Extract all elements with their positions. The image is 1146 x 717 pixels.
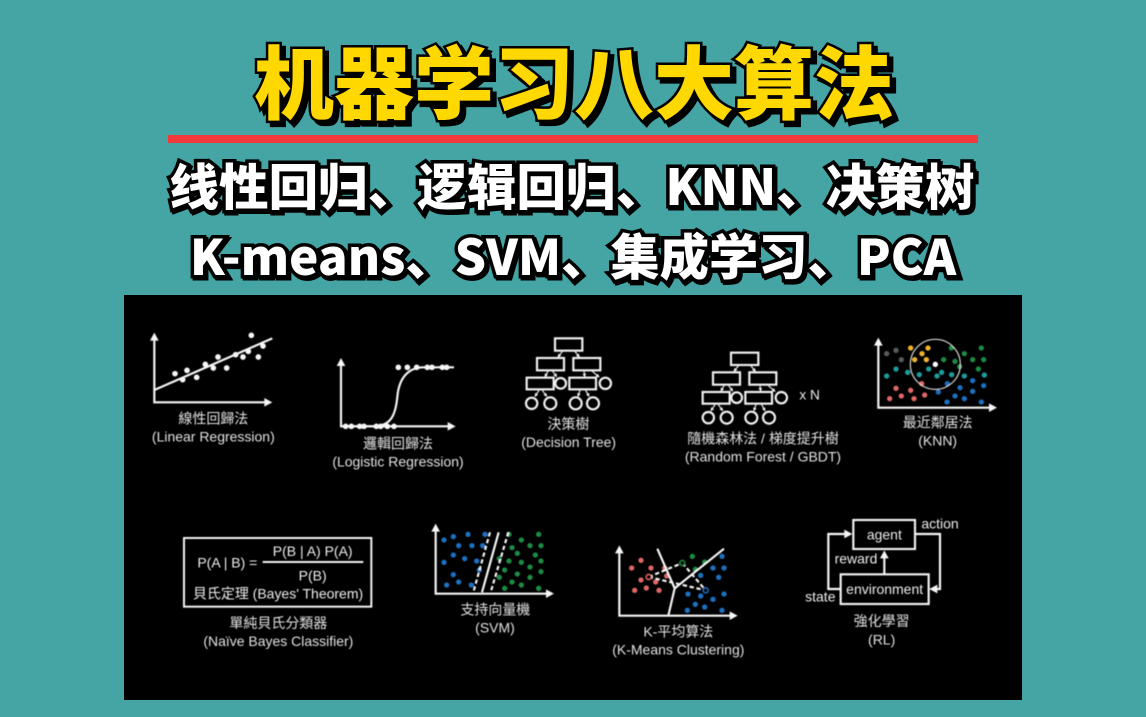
points: yellow — [908, 345, 931, 362]
label — [685, 431, 841, 464]
arrow labels: state — [805, 589, 836, 605]
label — [903, 415, 973, 449]
decision tree — [521, 338, 616, 450]
reward arrow — [880, 550, 889, 574]
SVM — [431, 524, 554, 635]
regression line — [154, 338, 272, 390]
points: red — [887, 381, 927, 401]
label: 邏輯回歸法 — [363, 436, 433, 452]
label — [332, 436, 464, 470]
label: (SVM) — [475, 619, 515, 635]
label: (Linear Regression) — [152, 428, 275, 444]
axes — [150, 333, 272, 407]
times N: x N — [799, 388, 820, 403]
arrow labels — [805, 515, 959, 605]
formula box: P(B | A) P(A) — [273, 543, 353, 559]
points: blue — [936, 378, 986, 405]
environment box — [841, 574, 929, 604]
label — [203, 615, 353, 649]
label — [854, 613, 910, 647]
blue points — [441, 532, 488, 588]
cluster boundaries — [657, 549, 724, 616]
panel: algorithms — [124, 295, 1022, 700]
label: 強化學習 — [854, 613, 910, 629]
centroid distance lines — [649, 563, 706, 590]
logistic regression — [332, 358, 464, 470]
label: 決策樹 — [547, 416, 589, 432]
data points — [172, 332, 266, 382]
agent box: agent — [867, 526, 902, 542]
environment box: environment — [846, 581, 923, 597]
tree diagram — [526, 338, 611, 409]
label: K-平均算法 — [643, 624, 713, 640]
formula box: P(A | B) = — [197, 555, 257, 571]
title: 机器学习八大算法 — [254, 21, 894, 137]
axes — [337, 358, 456, 431]
K-means — [612, 545, 744, 657]
random forest — [685, 353, 841, 464]
formula box: 貝氏定理 (Bayes' Theorem) — [193, 585, 363, 601]
formula box — [184, 538, 371, 607]
label — [152, 410, 275, 444]
tree diagram — [703, 353, 787, 424]
action arrow — [915, 534, 940, 593]
linear regression — [150, 332, 275, 444]
label — [460, 601, 530, 635]
sigmoid curve — [341, 367, 454, 426]
formula box: P(B) — [299, 567, 327, 583]
axes — [615, 545, 738, 620]
arrow labels: action — [921, 515, 959, 531]
blue cluster — [685, 554, 727, 613]
red cluster — [629, 558, 669, 593]
label: (Decision Tree) — [521, 434, 616, 450]
label: (K-Means Clustering) — [612, 641, 744, 657]
centroids — [646, 560, 708, 593]
label: (RL) — [868, 631, 895, 647]
subtitle line 2: K-means、SVM、集成学习、PCA — [190, 219, 957, 290]
reinforcement learning — [805, 515, 959, 647]
query point — [933, 362, 938, 367]
state arrow — [828, 530, 852, 589]
label: 支持向量機 — [460, 601, 530, 617]
green cluster — [690, 554, 707, 572]
naive Bayes — [184, 538, 371, 649]
axes — [874, 338, 997, 412]
label: 線性回歸法 — [178, 410, 248, 426]
label: (Random Forest / GBDT) — [685, 448, 841, 464]
neighbourhood circle — [910, 339, 960, 389]
axes — [431, 524, 554, 598]
label: 單純貝氏分類器 — [229, 615, 327, 631]
KNN — [874, 338, 997, 449]
label: (KNN) — [918, 433, 957, 449]
separating line and margins — [473, 532, 508, 592]
points: teal — [884, 366, 987, 379]
label: (Naïve Bayes Classifier) — [203, 633, 353, 649]
label — [612, 624, 744, 657]
agent box — [853, 520, 915, 549]
arrow labels: reward — [835, 551, 877, 567]
subtitle line 1: 线性回归、逻辑回归、KNN、决策树 — [169, 148, 975, 220]
label — [521, 416, 616, 450]
red divider bar — [168, 135, 978, 143]
green points — [497, 532, 544, 591]
label: (Logistic Regression) — [332, 454, 464, 470]
data points — [343, 364, 449, 429]
label: 最近鄰居法 — [903, 415, 973, 431]
points: grey — [884, 348, 904, 362]
label: 隨機森林法 / 梯度提升樹 — [687, 431, 839, 447]
points: green — [941, 345, 986, 372]
